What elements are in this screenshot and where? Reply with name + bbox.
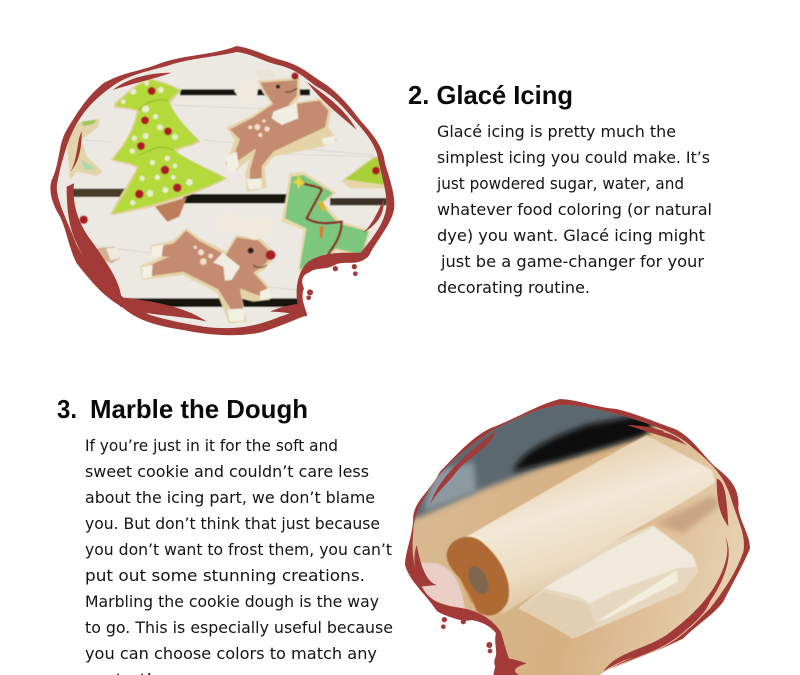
text block: marbling description: to go. This is especially useful because [85, 618, 393, 637]
rolling pin handle [460, 578, 474, 604]
rolling pin photo [412, 405, 744, 675]
text block: Glacé icing description: just be a game-changer for your [440, 252, 704, 271]
blurred kitchen background [414, 405, 646, 522]
text block: marbling description: sweet cookie and couldn’t care less [85, 462, 369, 481]
frame splatter dots [306, 264, 358, 300]
rolling pin [463, 435, 715, 617]
left edge cookies [67, 118, 120, 263]
frame splatter dots [441, 617, 492, 653]
text block: marbling description: you. But don’t think that just because [85, 514, 380, 533]
brush frame: cookies [50, 46, 394, 335]
cookie photo [56, 52, 387, 328]
brush frame: rolling pin [405, 399, 750, 675]
text block: marbling description: about the icing part, we don’t blame [85, 488, 375, 507]
text block: marbling description: Marbling the cookie dough is the way [85, 592, 379, 611]
right edge green cookie [342, 155, 387, 188]
heading: 2. Glacé Icing: 2. Glacé Icing [408, 80, 573, 110]
text block: Glacé icing description: Glacé icing is pretty much the [437, 122, 676, 141]
green star tree cookie [282, 172, 370, 273]
hand [414, 562, 466, 608]
rolling pin end [447, 537, 509, 616]
frame inner brush strokes [414, 425, 729, 675]
green tree cookie [110, 78, 227, 222]
text block: marbling description [85, 436, 393, 675]
image: rolling pin on folded dough in a brush-stroke frame [400, 395, 760, 675]
text block: marbling description: If you’re just in it for the soft and [85, 436, 338, 455]
image: decorated Christmas cookies in a brush-stroke frame [40, 40, 400, 340]
frame inner brush strokes [67, 73, 384, 322]
text block: Glacé icing description: decorating routine. [437, 278, 590, 297]
text block: Glacé icing description: simplest icing you could make. It’s [437, 148, 710, 167]
text block: marbling description: put out some stunning creations. [85, 566, 365, 585]
heading: 3. Marble the Dough: 3. [57, 394, 77, 424]
upper reindeer cookie [225, 68, 335, 190]
text block: marbling description: you can choose colors to match any [85, 644, 377, 663]
text block: marbling description: you don’t want to frost them, you can’t [85, 540, 392, 559]
text block: Glacé icing description: dye) you want. Glacé icing might [437, 226, 705, 245]
text block: Glacé icing description: just powdered sugar, water, and [436, 174, 684, 193]
lower reindeer cookie [140, 228, 277, 324]
wooden plank gaps [70, 89, 387, 307]
heading: 3. Marble the Dough: Marble the Dough [90, 394, 308, 424]
text block: Glacé icing description [436, 122, 712, 297]
folded dough [518, 525, 698, 638]
text block: Glacé icing description: whatever food coloring (or natural [437, 200, 712, 219]
